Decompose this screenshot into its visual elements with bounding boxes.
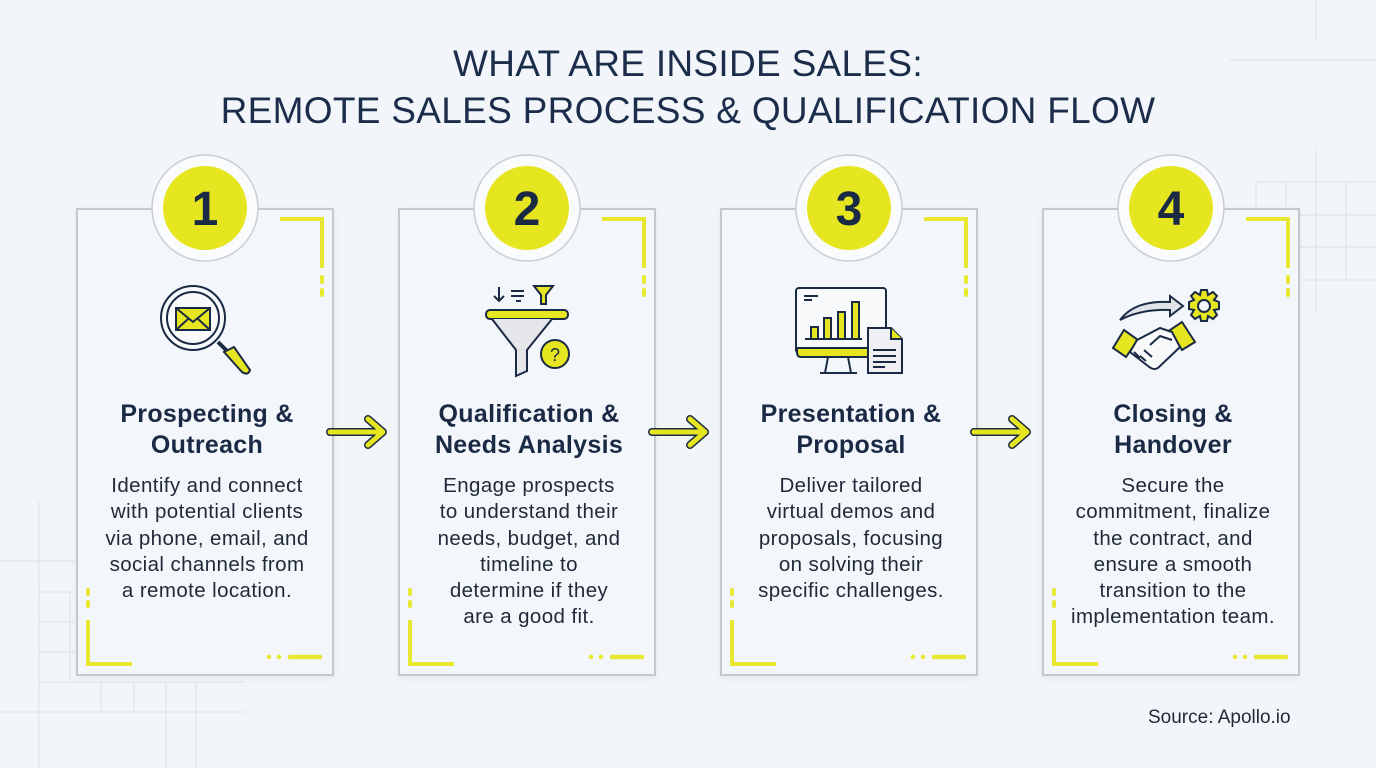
step badge 4: 4 xyxy=(1158,183,1185,236)
heading 3: Proposal xyxy=(796,431,906,459)
arrow 2 xyxy=(652,419,705,445)
text 4: ensure a smooth xyxy=(1094,553,1252,576)
heading 3 xyxy=(761,400,941,459)
text 3: virtual demos and xyxy=(767,500,935,523)
heading 1: Prospecting & xyxy=(120,400,294,428)
panel: step 2 xyxy=(398,208,656,676)
panel: step 1 xyxy=(76,208,334,676)
text 1: social channels from xyxy=(110,553,304,576)
text 4: the contract, and xyxy=(1093,527,1253,550)
step badge 2 xyxy=(410,155,644,664)
icon: funnel xyxy=(486,286,569,376)
title: REMOTE SALES PROCESS & QUALIFICATION FLOW xyxy=(221,90,1155,131)
arrow 3 xyxy=(974,419,1027,445)
heading 4: Closing & xyxy=(1113,400,1233,428)
text 1 xyxy=(105,474,309,602)
step badge 2: 2 xyxy=(514,183,540,236)
text 3: proposals, focusing xyxy=(759,527,943,550)
panel: step 3 xyxy=(720,208,978,676)
text 2: to understand their xyxy=(440,500,618,523)
icon: funnel: ? xyxy=(550,345,560,365)
arrow 1 xyxy=(330,419,383,445)
icon: monitor chart and document xyxy=(796,288,902,373)
step badge 3 xyxy=(732,155,966,664)
heading 1: Outreach xyxy=(151,431,263,459)
heading 2: Qualification & xyxy=(439,400,619,428)
heading 4: Handover xyxy=(1114,431,1232,459)
icon: magnifier with envelope xyxy=(161,286,250,374)
text 3: specific challenges. xyxy=(758,579,944,602)
title: WHAT ARE INSIDE SALES: xyxy=(453,43,923,84)
text 2 xyxy=(438,474,620,628)
text 2: timeline to xyxy=(480,553,578,576)
text 1: with potential clients xyxy=(111,500,303,523)
text 2: are a good fit. xyxy=(463,605,595,628)
text 2: Engage prospects xyxy=(443,474,615,497)
step badge 1 xyxy=(88,155,322,664)
text 2: needs, budget, and xyxy=(438,527,620,550)
heading 2: Needs Analysis xyxy=(435,431,623,459)
panel: step 4 xyxy=(1042,208,1300,676)
step badge 4 xyxy=(1054,155,1288,664)
step badge 3: 3 xyxy=(836,183,862,236)
text 4 xyxy=(1071,474,1275,628)
text 4: Secure the xyxy=(1121,474,1225,497)
heading 1 xyxy=(120,400,294,459)
text 3 xyxy=(758,474,944,602)
step badge 1: 1 xyxy=(192,183,218,236)
text 3: Deliver tailored xyxy=(779,474,923,497)
source: Source: Apollo.io xyxy=(1148,707,1291,728)
title xyxy=(221,43,1155,131)
heading 3: Presentation & xyxy=(761,400,941,428)
text 3: on solving their xyxy=(779,553,923,576)
heading 2 xyxy=(435,400,623,459)
text 2: determine if they xyxy=(450,579,608,602)
text 1: a remote location. xyxy=(122,579,292,602)
heading 4 xyxy=(1113,400,1233,459)
text 1: Identify and connect xyxy=(111,474,303,497)
text 4: commitment, finalize xyxy=(1076,500,1270,523)
icon: handshake with gear xyxy=(1113,290,1219,369)
text 1: via phone, email, and xyxy=(105,527,309,550)
text 4: transition to the xyxy=(1100,579,1246,602)
text 4: implementation team. xyxy=(1071,605,1275,628)
